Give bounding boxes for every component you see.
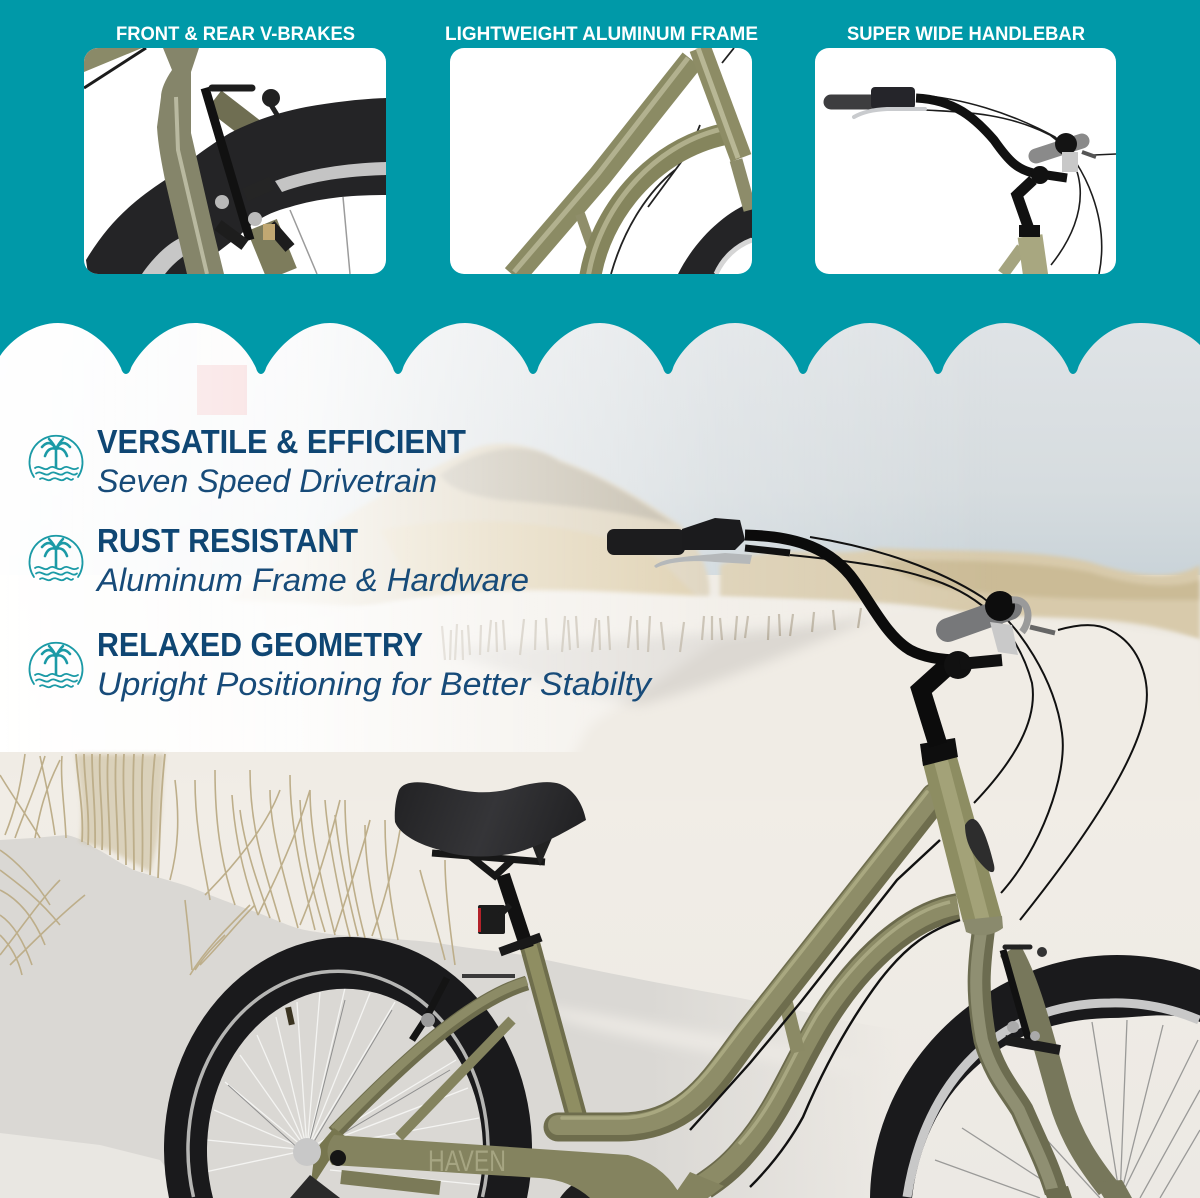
handlebar: [745, 535, 1002, 679]
heading: VERSATILE & EFFICIENT: [97, 423, 466, 460]
white fade behind features: [0, 323, 862, 752]
front brake: [1003, 947, 1060, 1050]
far dunes with grass, right: [720, 548, 1200, 640]
heading: RELAXED GEOMETRY: [97, 626, 423, 663]
rear light: [478, 905, 510, 934]
far dune with grass, left: [230, 444, 710, 610]
upper frame tube: [558, 792, 935, 1127]
label: lightweight aluminum frame: LIGHTWEIGHT ALUMINUM FRAME: [445, 23, 758, 45]
seat clamp: [500, 937, 541, 952]
stem: [921, 662, 952, 745]
dune grass fence: [442, 608, 861, 660]
headset collar: [920, 738, 958, 766]
sand shadows: [440, 615, 880, 705]
subheading: Seven Speed Drivetrain: [97, 463, 437, 499]
bike: [164, 518, 1200, 1198]
head tube: [922, 757, 1003, 935]
right grip and reflector: [948, 591, 1055, 655]
lower frame tube: [702, 902, 958, 1186]
chainring behind guard: [560, 1173, 655, 1198]
lower tube stub to frame edge: [672, 1172, 724, 1198]
lower sand highlight: [0, 1133, 190, 1198]
icon: palm island: [30, 643, 82, 687]
beach grass lower left: [0, 754, 455, 975]
panel: brake close-up: [84, 48, 386, 274]
feature: versatile and efficient: [30, 423, 466, 499]
panel: handlebar close-up: [815, 48, 1116, 278]
front fork: [976, 925, 1056, 1192]
seat post: [503, 875, 527, 948]
foreground sand ridge: [250, 590, 1200, 800]
front fork stub: [1044, 1186, 1072, 1198]
rear brake: [412, 976, 515, 1040]
label: super wide handlebar: SUPER WIDE HANDLEBAR: [847, 23, 1085, 45]
lighthouse: [197, 323, 247, 415]
left grip and shifter: [607, 518, 790, 568]
subheading: Aluminum Frame & Hardware: [95, 562, 529, 598]
chain guard: [290, 1128, 682, 1198]
rear wheel: [164, 937, 532, 1198]
panel: frame close-up: [450, 48, 752, 278]
chain stays and rear triangle: [334, 981, 527, 1188]
main cables: [690, 537, 1147, 1187]
lower left dune: [0, 835, 900, 1198]
teal header with scalloped edge: [0, 0, 1200, 374]
saddle: [395, 782, 586, 876]
feature: rust resistant: [30, 522, 529, 598]
heading: RUST RESISTANT: [97, 522, 358, 559]
head badge: [965, 819, 994, 872]
chain guard: HAVEN: [428, 1145, 506, 1178]
feature: relaxed geometry: [30, 626, 653, 702]
subheading: Upright Positioning for Better Stabilty: [97, 666, 653, 702]
icon: palm island: [30, 436, 82, 480]
front wheel: [870, 955, 1200, 1198]
label: front and rear v-brakes: FRONT & REAR V-BRAKES: [116, 23, 355, 45]
icon: palm island: [30, 536, 82, 580]
sand band highlight, middle: [530, 1005, 880, 1075]
seat tube: [530, 945, 577, 1118]
frame connector: [786, 1003, 798, 1052]
rear fork leg: [1010, 950, 1108, 1188]
beach photo background: [0, 323, 1200, 1198]
rear fork stub: [1094, 1180, 1132, 1198]
